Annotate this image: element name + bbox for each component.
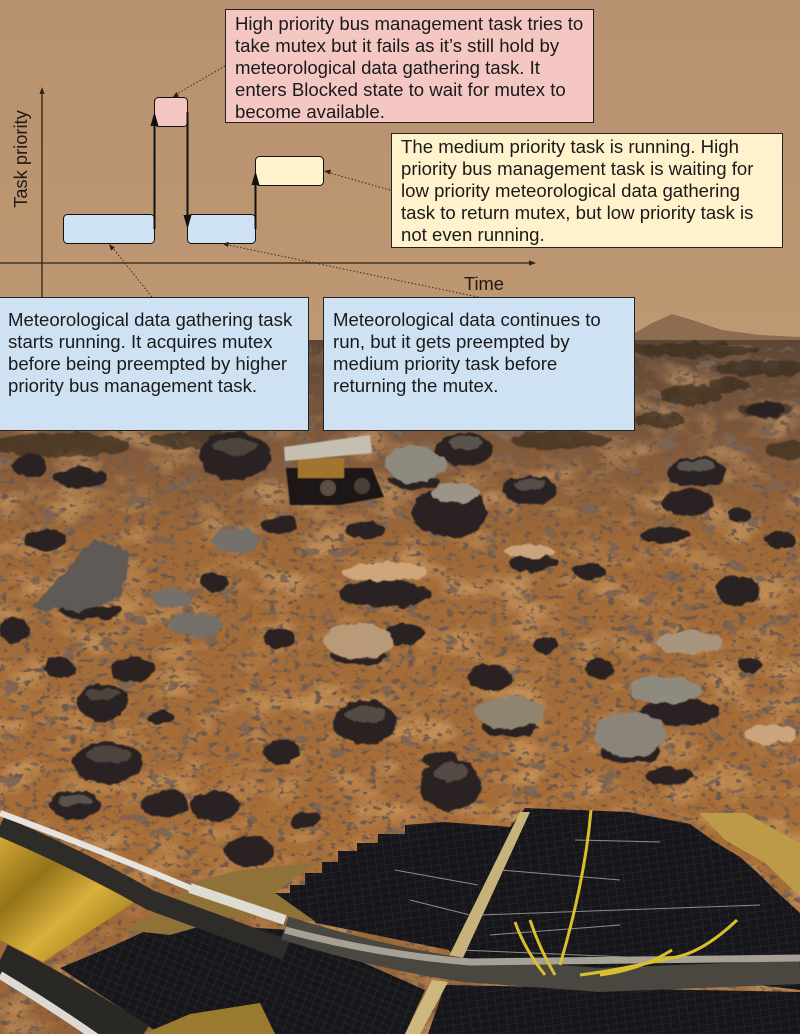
panel seams [395,840,760,960]
callout: high priority task: enters Blocked state to wait for mutex to [235,79,566,100]
lower left solar panel [60,922,425,1034]
callout: medium priority task: task to return mutex, but low priority task is [401,202,753,223]
callout: low priority task starts: Meteorological data gathering task [8,309,292,330]
main rail [0,826,286,950]
callout: low priority task resumes: returning the mutex. [333,375,498,396]
rocks: dark bodies [0,403,796,866]
arrow: preempt up to high priority [150,112,158,229]
callout: low priority task resumes: Meteorological data continues to [333,309,601,330]
far rock strip [0,343,800,459]
callout: medium priority task: The medium priority task is running. High [401,136,739,157]
centre strip [448,812,530,960]
callout: medium priority task [391,133,783,248]
gold foil left [0,835,142,962]
callout: high priority task [225,9,594,123]
rocks: light tan tops [323,483,795,744]
gold foil right [699,813,800,897]
callout: low priority task starts: starts running. It acquires mutex [8,331,273,352]
arrow: down to low priority [184,112,192,229]
task: medium priority [256,156,324,186]
task: low priority run 1 [64,214,154,244]
callout: high priority task: High priority bus management task tries to [235,13,583,34]
axis label: task priority: Task priority [10,110,31,208]
dotted leader: low priority start [109,244,152,297]
dotted leader: low priority resume [222,242,478,297]
callout: medium priority task: low priority meteorological data gathering [401,180,740,201]
lower strip [405,980,448,1034]
callout: low priority task resumes [323,297,635,431]
dotted leader: high priority [172,66,225,98]
task: high priority [154,98,188,126]
ground colour variation [0,345,800,1034]
callout: medium priority task: not even running. [401,224,545,245]
callout: low priority task resumes: run, but it gets preempted by [333,331,570,352]
callout: high priority task: take mutex but it fails as it’s still hold by [235,35,559,56]
sky [0,0,800,345]
gravel texture [0,345,800,1034]
x axis [0,260,536,266]
callout: low priority task resumes: medium priority task before [333,353,557,374]
lander [0,808,800,1034]
yellow cables [515,810,737,975]
dotted leader: medium priority [324,170,390,190]
rocks: grey bodies [30,435,717,805]
arrow: up to medium priority [252,171,260,229]
callout: low priority task starts [0,297,309,431]
axis label: time: Time [464,273,504,294]
task: low priority run 2 [188,214,256,244]
y axis [39,87,45,297]
small stones [0,345,800,1034]
ground [0,340,800,1034]
callout: low priority task starts: before being preempted by higher [8,353,287,374]
callout: low priority task starts: priority bus management task. [8,375,257,396]
lower tube [0,960,140,1034]
lower right solar panel [428,985,800,1034]
distant hill [630,314,800,360]
gold foil centre [125,863,316,935]
gold foil bottom [143,1003,275,1034]
rover [284,435,384,505]
callout: high priority task: become available. [235,101,385,122]
callout: high priority task: meteorological data gathering task. It [235,57,540,78]
upper solar panel [275,808,800,990]
callout: medium priority task: priority bus management task is waiting for [401,158,753,179]
